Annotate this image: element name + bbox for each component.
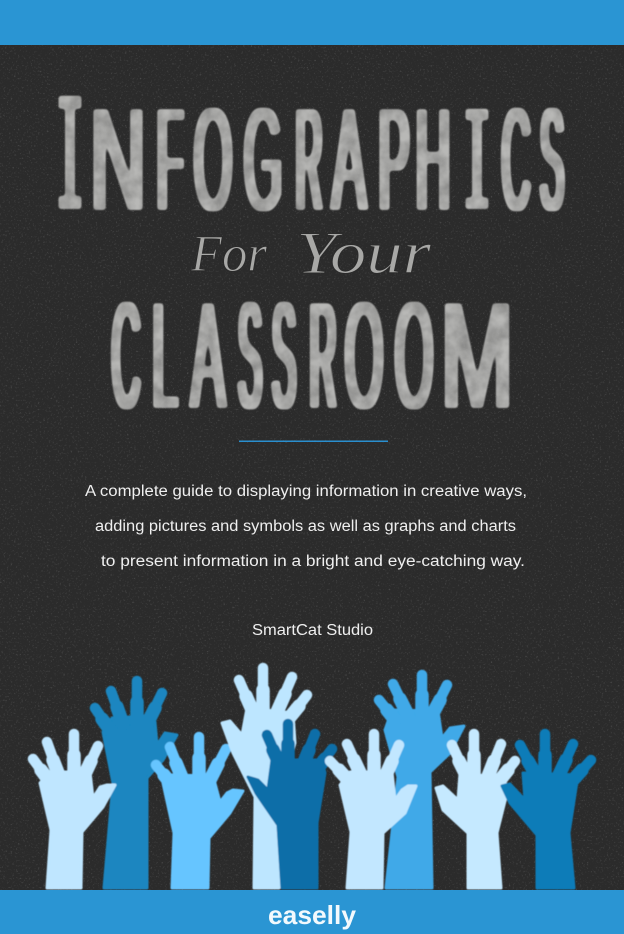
title: Classroom: C bbox=[112, 270, 140, 441]
title: Infographics: C bbox=[502, 78, 530, 241]
hand: pale blue, far left bbox=[33, 734, 115, 888]
title: Classroom: M bbox=[441, 272, 513, 441]
blue divider line bbox=[239, 440, 388, 442]
title: Infographics: I bbox=[464, 82, 490, 255]
hand: sky blue, third from left bbox=[156, 737, 243, 888]
hand: bright blue, right of centre back bbox=[379, 675, 464, 888]
title: Infographics: A bbox=[332, 79, 366, 242]
title: Classroom: O bbox=[395, 271, 433, 440]
title: Classroom bbox=[112, 270, 513, 442]
subtitle: For Your bbox=[190, 220, 432, 286]
title: Infographics: S bbox=[540, 77, 564, 242]
description text: adding pictures and symbols as well as graphs and charts bbox=[95, 518, 516, 535]
title: Classroom: R bbox=[310, 272, 336, 441]
title: Classroom: L bbox=[152, 270, 178, 441]
title: Classroom: S bbox=[272, 272, 296, 441]
title: Infographics: I bbox=[57, 66, 83, 261]
title: Classroom: S bbox=[238, 272, 262, 441]
title: Infographics: G bbox=[244, 79, 282, 242]
description text: A complete guide to displaying information in creative ways, bbox=[85, 483, 527, 500]
description text: to present information in a bright and eye-catching way. bbox=[101, 553, 525, 570]
hand: pale blue, second from right bbox=[436, 734, 515, 888]
raised hands illustration bbox=[33, 668, 591, 888]
title: Infographics: R bbox=[296, 77, 322, 242]
author credit: SmartCat Studio bbox=[252, 622, 373, 639]
hand: pale blue, centre back bbox=[222, 668, 307, 888]
subtitle: For Your: Your bbox=[296, 220, 432, 286]
description text bbox=[85, 483, 527, 570]
title: Infographics: P bbox=[378, 79, 410, 242]
hand: deep blue, far right bbox=[502, 734, 591, 888]
hand: mid blue, second from left bbox=[95, 681, 177, 888]
title: Infographics: N bbox=[90, 77, 146, 241]
title: Infographics: O bbox=[194, 79, 232, 242]
hand: dark blue, centre front bbox=[248, 724, 332, 888]
title: Classroom: O bbox=[345, 271, 383, 440]
title: Infographics: F bbox=[157, 77, 183, 241]
title: Infographics bbox=[57, 66, 564, 261]
top blue bar bbox=[0, 0, 624, 45]
title: Infographics: H bbox=[416, 78, 450, 242]
title: Classroom: A bbox=[191, 271, 225, 442]
hand: pale blue, right of centre front bbox=[330, 734, 416, 888]
easelly logo wordmark: easelly bbox=[268, 900, 357, 930]
subtitle: For Your: For bbox=[190, 226, 268, 283]
bottom blue bar bbox=[0, 890, 624, 934]
